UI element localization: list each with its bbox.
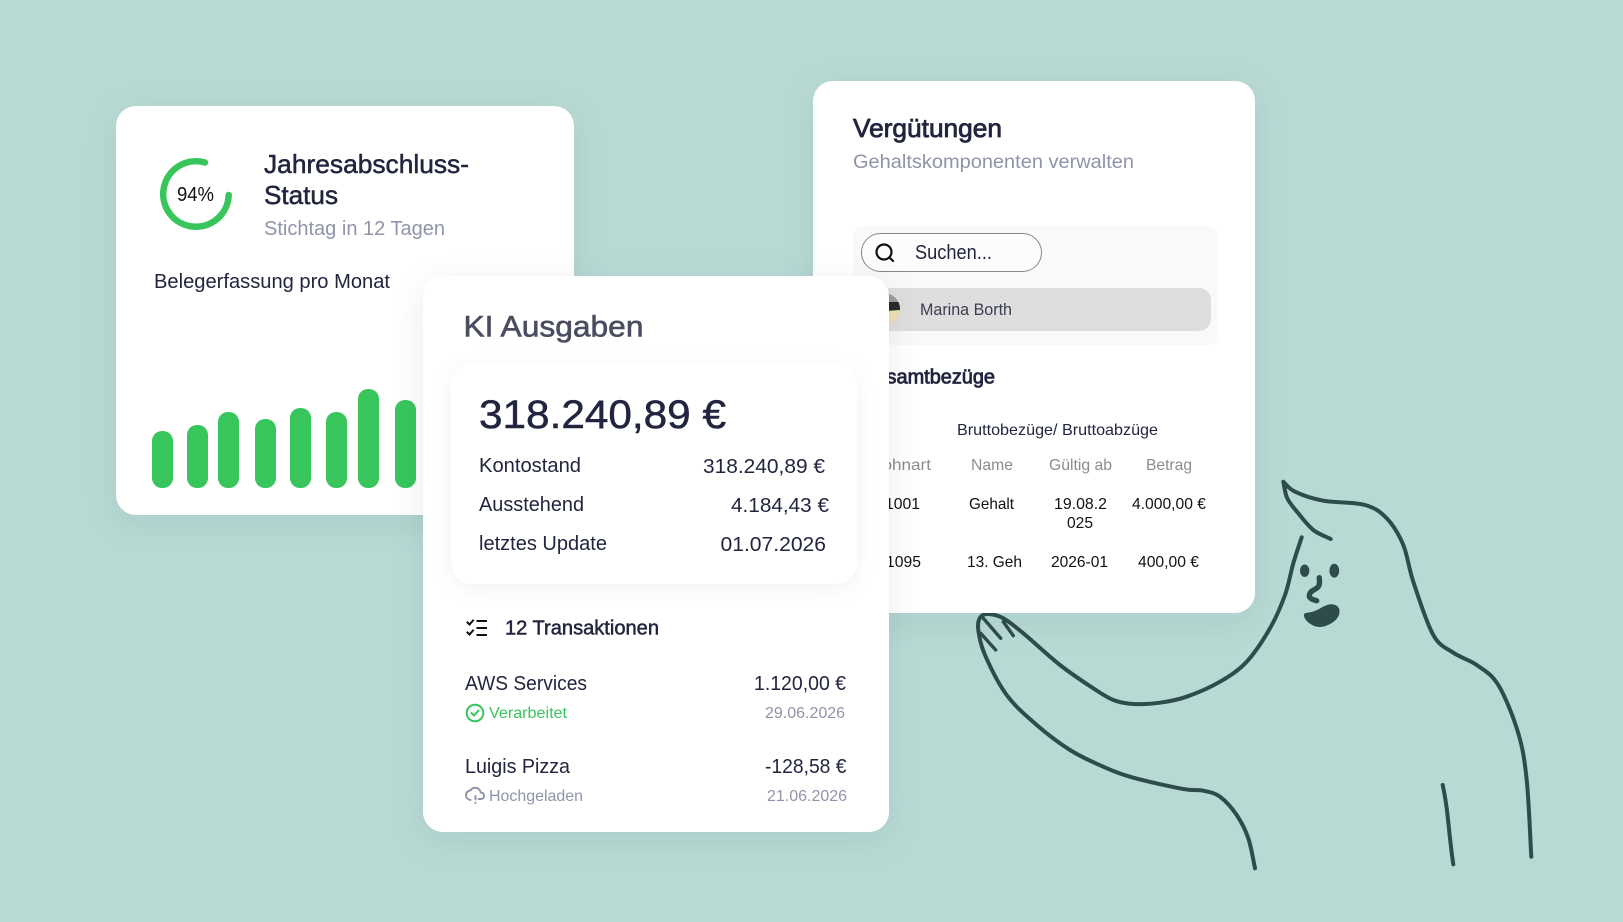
balance row: Kontostand: 318.240,89 € bbox=[703, 456, 825, 478]
table row 1: 025 bbox=[1067, 515, 1093, 532]
nose bbox=[1309, 578, 1320, 601]
table bbox=[873, 422, 1206, 571]
transaction: Luigis Pizza: Hochgeladen bbox=[489, 788, 583, 805]
card title: Jahresabschluss- bbox=[264, 149, 469, 179]
icon: processed check bbox=[467, 705, 483, 721]
balance panel bbox=[451, 364, 857, 584]
panel: Jahresabschluss bbox=[116, 106, 574, 515]
table header: Lohnart bbox=[873, 457, 932, 474]
icon: checklist bbox=[468, 620, 486, 635]
table title: Bruttobezüge/ Bruttoabzüge bbox=[957, 422, 1158, 439]
bar chart bbox=[152, 389, 416, 488]
card background bbox=[423, 276, 889, 832]
balance row: Ausstehend bbox=[479, 494, 829, 517]
balance row: Ausstehend: 4.184,43 € bbox=[731, 495, 829, 517]
table row 1: 1001 bbox=[885, 496, 920, 513]
employee name: Marina Borth bbox=[920, 301, 1012, 319]
chart heading: Belegerfassung pro Monat bbox=[154, 271, 390, 293]
card subtitle: Stichtag in 12 Tagen bbox=[264, 218, 445, 240]
table header: Name bbox=[971, 457, 1013, 474]
table row 2: 13. Geh bbox=[967, 554, 1022, 571]
transaction: Luigis Pizza: Luigis Pizza bbox=[465, 756, 571, 778]
search panel bbox=[853, 226, 1218, 345]
table row 2: 400,00 € bbox=[1138, 554, 1199, 571]
table row 2: 1095 bbox=[886, 554, 921, 571]
balance row: letztes Update bbox=[479, 533, 826, 556]
ring value: 94% bbox=[177, 184, 214, 206]
card background bbox=[116, 106, 574, 515]
eyes bbox=[1300, 564, 1339, 578]
mouth bbox=[1304, 604, 1340, 627]
balance row: Ausstehend: Ausstehend bbox=[479, 494, 584, 516]
balance row: letztes Update: 01.07.2026 bbox=[720, 534, 826, 556]
body line bbox=[1443, 785, 1453, 864]
icon: magnifier bbox=[876, 244, 893, 261]
arm outline bbox=[978, 537, 1302, 868]
illustration: waving character bbox=[978, 482, 1531, 868]
card subtitle: Gehaltskomponenten verwalten bbox=[853, 152, 1134, 173]
section heading: Gesamtbezüge bbox=[860, 366, 995, 388]
search box bbox=[862, 234, 1042, 272]
selected employee row bbox=[861, 288, 1211, 331]
balance row: Kontostand: Kontostand bbox=[479, 455, 581, 477]
fingers bbox=[981, 618, 1013, 650]
transaction: AWS Services: 29.06.2026 bbox=[765, 705, 845, 722]
transaction: Luigis Pizza: -128,58 € bbox=[765, 756, 846, 778]
table row 1: 4.000,00 € bbox=[1132, 496, 1206, 513]
panel: Vergütungen bbox=[813, 81, 1255, 613]
progress ring bbox=[163, 161, 229, 227]
table header bbox=[873, 457, 1192, 474]
balance total: 318.240,89 € bbox=[479, 393, 726, 437]
transaction: Luigis Pizza bbox=[465, 756, 847, 805]
table header: Betrag bbox=[1146, 457, 1192, 474]
transaction: Luigis Pizza: 21.06.2026 bbox=[767, 788, 847, 805]
transaction: AWS Services bbox=[465, 673, 846, 722]
table row 1: Gehalt bbox=[969, 496, 1015, 513]
table header: Gültig ab bbox=[1049, 457, 1112, 474]
table row 2: 2026-01 bbox=[1051, 554, 1108, 571]
card title: Vergütungen bbox=[853, 113, 1002, 143]
search placeholder: Suchen... bbox=[915, 242, 992, 264]
balance row: Kontostand bbox=[479, 455, 825, 478]
balance row: letztes Update: letztes Update bbox=[479, 533, 607, 555]
table row 1 bbox=[885, 496, 1206, 532]
table row 2 bbox=[886, 554, 1199, 571]
card background bbox=[813, 81, 1255, 613]
transactions heading: 12 Transaktionen bbox=[505, 618, 659, 640]
head and back outline bbox=[1283, 482, 1531, 857]
icon: upload cloud bbox=[466, 788, 484, 803]
panel: KI Ausgaben bbox=[423, 276, 889, 832]
transaction: AWS Services: 1.120,00 € bbox=[754, 673, 846, 695]
transaction: AWS Services: Verarbeitet bbox=[489, 705, 568, 722]
table row 1: 19.08.2 bbox=[1054, 496, 1107, 513]
avatar bbox=[888, 294, 900, 324]
card title bbox=[264, 149, 469, 210]
transaction: AWS Services: AWS Services bbox=[465, 673, 587, 695]
card title: KI Ausgaben bbox=[464, 310, 644, 344]
card title: Status bbox=[264, 180, 338, 210]
